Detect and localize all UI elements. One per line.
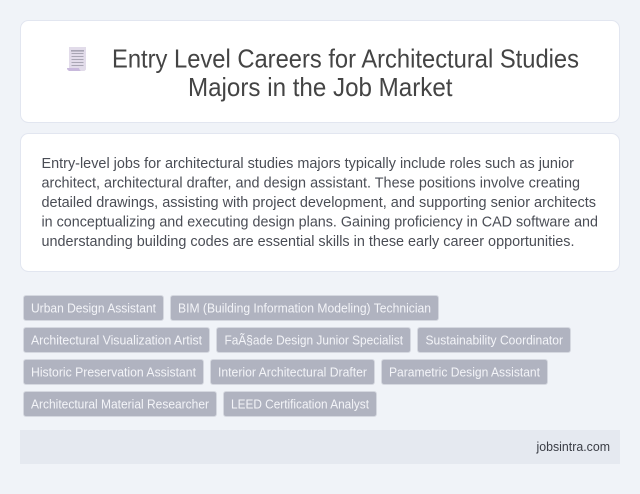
description text: Entry-level jobs for architectural studies majors typically include roles such as junior (42, 155, 574, 172)
description text: architect, architectural drafter, and design assistant. These positions involve creating (42, 174, 580, 192)
footer (20, 430, 620, 464)
title (112, 44, 579, 102)
icon: paper scroll (67, 47, 86, 71)
tag list (24, 296, 570, 416)
tag: Facade Design Junior Specialist: FaÃ§ade Design Junior Specialist (224, 332, 403, 348)
tag: Historic Preservation Assistant (24, 360, 204, 384)
description text (42, 155, 598, 250)
tag: Urban Design Assistant (24, 296, 164, 320)
tag: Parametric Design Assistant (382, 360, 548, 384)
tag: Architectural Material Researcher: Architectural Material Researcher (31, 396, 210, 412)
footer text: jobsintra.com (536, 440, 610, 454)
tag: Sustainability Coordinator (418, 328, 570, 352)
panel: description (20, 134, 620, 272)
tag: Urban Design Assistant: Urban Design Assistant (31, 300, 156, 316)
tag: Sustainability Coordinator: Sustainability Coordinator (426, 332, 564, 348)
tag: Interior Architectural Drafter (210, 360, 374, 384)
description text: in conceptualizing and executing design plans. Gaining proficiency in CAD software and (42, 214, 598, 230)
description text: detailed drawings, assisting with project development, and supporting senior architects (42, 194, 596, 211)
tag: BIM Technician (170, 296, 438, 320)
description text: understanding building codes are essential skills in these early career opportunities. (42, 233, 574, 250)
tag: Architectural Visualization Artist (24, 328, 210, 352)
panel: header (20, 20, 620, 122)
tag: Parametric Design Assistant: Parametric Design Assistant (389, 364, 540, 380)
tag: Facade Design Junior Specialist (216, 328, 410, 352)
tag: LEED Certification Analyst: LEED Certification Analyst (231, 396, 369, 412)
tag: BIM Technician: BIM (Building Information Modeling) Technician (178, 300, 431, 316)
title: Entry Level Careers for Architectural Studies (112, 44, 579, 74)
tag: LEED Certification Analyst (224, 392, 376, 416)
tag: Architectural Material Researcher (24, 392, 216, 416)
tag: Interior Architectural Drafter: Interior Architectural Drafter (218, 364, 368, 380)
tag: Historic Preservation Assistant: Historic Preservation Assistant (31, 364, 196, 380)
tag: Architectural Visualization Artist: Architectural Visualization Artist (31, 332, 202, 348)
title: Majors in the Job Market (188, 72, 453, 102)
